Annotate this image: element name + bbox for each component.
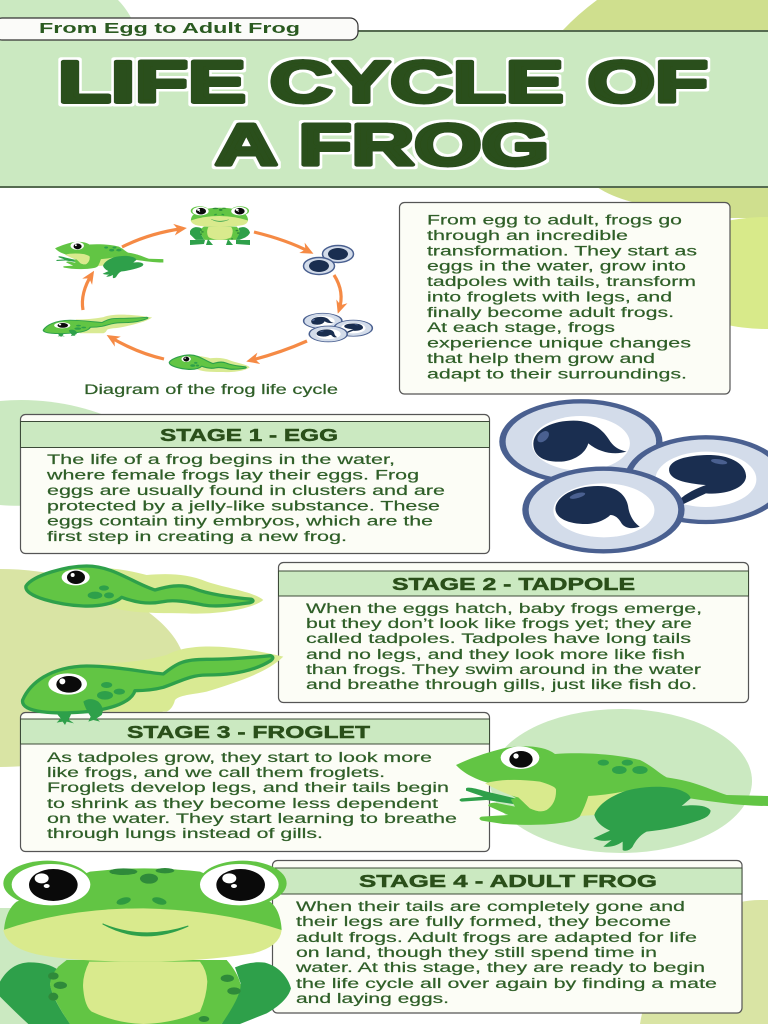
icon: tadpole large [26, 566, 263, 614]
text: stage 4 body: the life cycle all over again by finding a mate [296, 976, 717, 991]
panel: introduction: experience unique changes [427, 336, 691, 351]
text: stage 2 body [306, 601, 702, 692]
text: stage 2 body: and no legs, and they look more like fish [306, 647, 685, 662]
diagram: frog life cycle [43, 206, 372, 397]
panel: introduction: through an incredible [427, 228, 628, 243]
icon: adult frog large [0, 861, 291, 1024]
title: A FROG [215, 113, 549, 178]
text: stage 1 body: protected by a jelly-like substance. These [47, 498, 440, 513]
icon: small tadpole [169, 355, 250, 372]
text: stage 1 body: eggs contain tiny embryos, which are the [47, 513, 433, 528]
text: stage 2 body: called tadpoles. Tadpoles have long tails [306, 631, 691, 646]
icon: two eggs [304, 246, 354, 274]
panel: introduction: into froglets with legs, and [427, 290, 672, 305]
title: LIFE CYCLE OF [58, 50, 708, 115]
heading: stage 1: STAGE 1 - EGG [160, 425, 338, 445]
panel: introduction: adapt to their surroundings. [427, 366, 687, 381]
panel: stage 2 tadpole [278, 562, 748, 702]
text: stage 4 body: adult frogs. Adult frogs are adapted for life [296, 930, 697, 945]
text: stage 2 body: When the eggs hatch, baby frogs emerge, [306, 601, 702, 616]
text: stage 2 body: and breathe through gills, just like fish do. [306, 677, 697, 692]
text: stage 1 body: where female frogs lay their eggs. Frog [45, 467, 419, 482]
text: stage 3 body: through lungs instead of gills. [47, 826, 323, 841]
panel: introduction: tadpoles with tails, transform [427, 274, 696, 289]
text: stage 1 body: eggs are usually found in clusters and are [47, 483, 445, 498]
text: stage 1 body: The life of a frog begins in the water, [47, 452, 395, 467]
text: stage 3 body: As tadpoles grow, they start to look more [47, 750, 432, 765]
text: stage 4 body [294, 899, 717, 1006]
subtitle pill [0, 18, 358, 40]
text: stage 3 body: Froglets develop legs, and their tails begin [47, 780, 449, 795]
text: stage 2 body: but they don’t look like frogs yet; they are [306, 616, 692, 631]
panel: introduction: At each stage, frogs [427, 320, 615, 335]
text: stage 3 body [47, 750, 457, 841]
text: stage 4 body: their legs are fully formed, they become [296, 914, 671, 929]
panel: introduction [400, 202, 730, 394]
icon: tadpole with legs small [43, 315, 152, 337]
heading: stage 3: STAGE 3 - FROGLET [127, 722, 370, 742]
text: stage 1 body [45, 452, 445, 544]
diagram caption: Diagram of the frog life cycle [84, 382, 338, 397]
text: stage 3 body: to shrink as they become less dependent [47, 796, 438, 811]
text: stage 3 body: on the water. They start learning to breathe [47, 811, 457, 826]
arrows [82, 228, 341, 360]
subtitle pill: From Egg to Adult Frog [39, 21, 300, 37]
panel: introduction: eggs in the water, grow into [427, 259, 686, 274]
heading: stage 2: STAGE 2 - TADPOLE [392, 574, 635, 594]
text: stage 4 body: on land, though they still spend time in [296, 945, 657, 960]
text: stage 4 body: When their tails are completely gone and [296, 899, 685, 914]
text: stage 4 body: water. At this stage, they are ready to begin [294, 960, 705, 975]
icon: large eggs with embryos [502, 401, 768, 551]
icon: adult frog small [190, 206, 250, 245]
icon: three embryos [304, 313, 372, 342]
panel: stage 1 egg [20, 414, 490, 554]
title [58, 50, 708, 178]
panel: introduction: transformation. They start as [427, 243, 697, 258]
header band [0, 30, 768, 188]
panel: stage 4 adult frog [272, 860, 742, 1013]
text: stage 3 body: like frogs, and we call them froglets. [47, 765, 385, 780]
panel: stage 3 froglet [20, 712, 490, 852]
heading: stage 4: STAGE 4 - ADULT FROG [359, 871, 657, 891]
text: stage 2 body: than frogs. They swim around in the water [306, 662, 702, 677]
panel: introduction: that help them grow and [427, 351, 655, 366]
panel: introduction: finally become adult frogs. [427, 305, 674, 320]
icon: tadpole with legs large [23, 646, 283, 725]
text: stage 4 body: and laying eggs. [296, 991, 449, 1006]
text: stage 1 body: first step in creating a new frog. [47, 529, 347, 544]
icon: froglet small [55, 242, 163, 278]
panel: introduction: From egg to adult, frogs go [427, 212, 682, 228]
icon: froglet large [456, 746, 768, 851]
